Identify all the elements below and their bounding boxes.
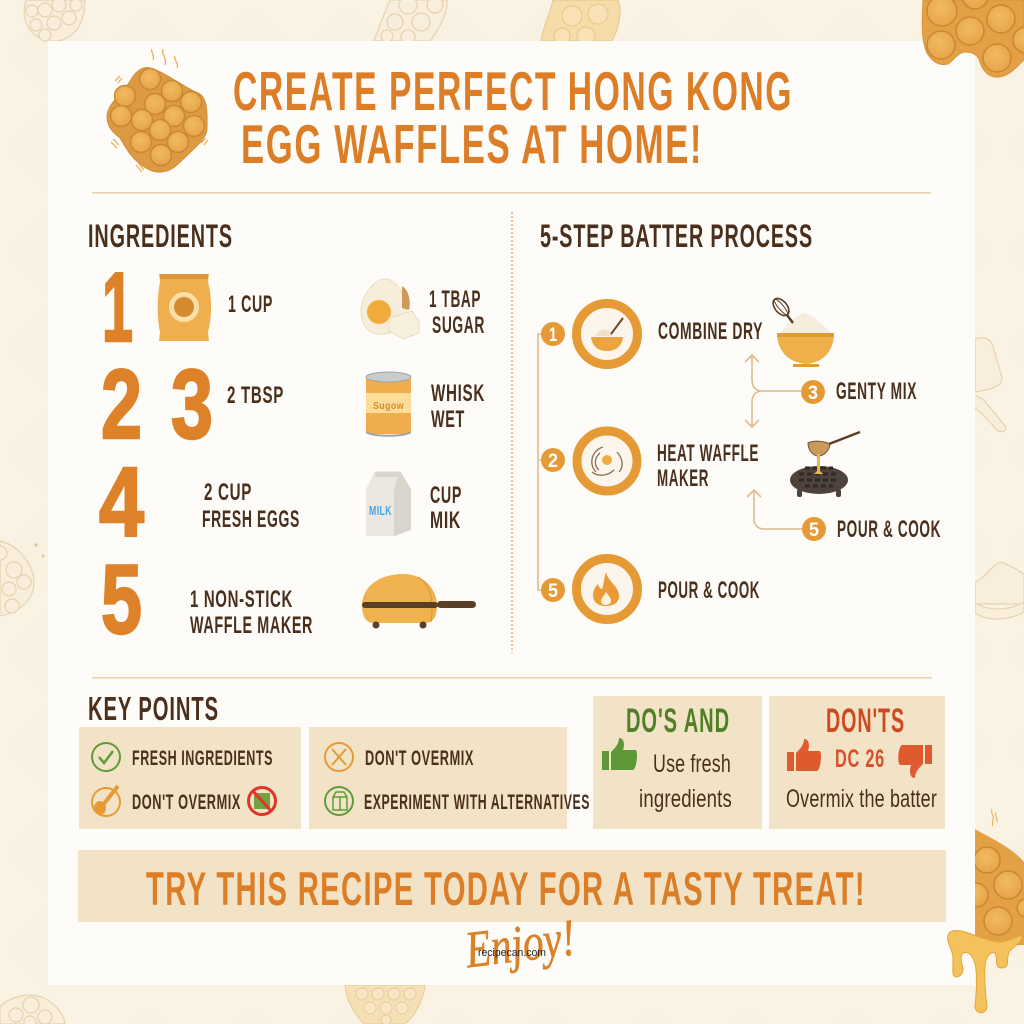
do's heading: DO'S AND — [626, 702, 730, 740]
icon: no mixing — [248, 788, 276, 814]
dotted column divider — [511, 212, 513, 653]
panel: process flow — [538, 295, 941, 620]
text: dc 26: DC 26 — [835, 745, 885, 773]
step 1: COMBINE DRY — [658, 318, 763, 345]
label: whisk wet — [431, 380, 485, 433]
arrow from step 5 — [747, 490, 802, 529]
icon: whisk and bowl — [770, 295, 834, 367]
amount: 2 cup fresh eggs: FRESH EGGS — [202, 506, 300, 533]
background sketch waffle: top left — [24, 0, 85, 41]
icon: thumbs down red — [898, 745, 932, 778]
number 5: 5 — [101, 544, 142, 654]
do text: ingredients — [639, 785, 732, 813]
corner waffle: top right — [922, 0, 1024, 77]
panel: don'ts — [769, 696, 945, 829]
icon: can — [366, 372, 411, 437]
step 5 — [541, 558, 760, 620]
background sketch waffle: top centre — [374, 0, 447, 44]
step 3: 3 — [808, 383, 818, 404]
text: fresh ingredients: FRESH INGREDIENTS — [132, 747, 273, 770]
amount: 1 cup: 1 CUP — [228, 291, 273, 318]
icon: thumbs up — [602, 738, 637, 770]
text: don't overmix: DON'T OVERMIX — [365, 747, 474, 770]
label: cup milk — [430, 482, 462, 534]
label: cup milk: CUP — [430, 482, 462, 509]
label: 1 tbap sugar: 1 TBAP — [429, 286, 481, 313]
icon: spoon — [92, 786, 120, 816]
divider top — [92, 192, 931, 194]
panel: ingredient list — [99, 252, 485, 654]
step 2: HEAT WAFFLE — [657, 440, 759, 467]
step 2 — [541, 431, 759, 492]
do text — [639, 750, 732, 813]
icon: milk carton — [366, 471, 411, 536]
enjoy script: Enjoy! — [461, 909, 578, 980]
icon: egg and sugar — [361, 279, 419, 339]
step 3 — [801, 378, 917, 405]
step 5 side: 5 — [809, 520, 819, 541]
icon: check — [92, 743, 120, 771]
title — [233, 60, 793, 175]
panel: key points right — [309, 727, 590, 829]
icon: flour bag — [158, 274, 211, 341]
label: 1 tbap sugar: SUGAR — [432, 312, 485, 339]
panel: do's — [593, 696, 762, 829]
don'ts heading: DON'TS — [826, 702, 905, 740]
step 3: GENTY MIX — [836, 378, 917, 405]
icon: can: Sugow — [373, 401, 404, 412]
step 5: 5 — [548, 581, 558, 602]
icon: hero egg waffle — [107, 49, 208, 172]
amount: 2 cup fresh eggs: 2 CUP — [204, 479, 252, 506]
background sketch: flour bowl — [975, 562, 1024, 619]
number 3: 3 — [171, 349, 213, 459]
step 5 side: POUR & COOK — [837, 516, 941, 543]
background waffle: top golden — [541, 0, 620, 45]
icon: waffle maker — [362, 574, 476, 628]
title: EGG WAFFLES AT HOME! — [241, 113, 703, 175]
step 2: MAKER — [657, 465, 709, 492]
call to action banner — [78, 850, 946, 922]
amount: non-stick waffle maker: 1 NON-STICK — [190, 586, 293, 613]
corner waffle with honey: bottom right — [948, 809, 1024, 1013]
label: whisk wet: WET — [431, 406, 465, 433]
background waffle: bottom centre — [345, 985, 425, 1024]
number 4: 4 — [99, 447, 144, 557]
amount: 2 cup fresh eggs — [202, 479, 300, 533]
heading: ingredients: INGREDIENTS — [88, 218, 233, 254]
label: cup milk: MIK — [430, 507, 461, 534]
background sketch waffle: bottom left — [0, 995, 65, 1024]
heading: 5-step batter process: 5-STEP BATTER PROCESS — [540, 218, 813, 254]
step 2: 2 — [548, 451, 558, 472]
label: 1 tbap sugar — [429, 286, 485, 339]
connector rail — [538, 334, 553, 590]
number 1: 1 — [102, 252, 133, 362]
amount: 2 tbsp: 2 TBSP — [227, 382, 284, 409]
text: don't overmix: DON'T OVERMIX — [132, 791, 241, 814]
amount: non-stick waffle maker — [190, 586, 313, 639]
heading: key points: KEY POINTS — [88, 690, 219, 727]
watermark: recipecan.com — [478, 947, 546, 959]
text: experiment with alternatives: EXPERIMENT WITH ALTERNATIVES — [364, 791, 590, 814]
don't text: Overmix the batter — [786, 785, 937, 813]
background sketch: scoop — [975, 338, 1006, 432]
panel: key points left — [79, 727, 301, 829]
branch arrows to step 3 — [745, 355, 801, 427]
icon: milk carton: MILK — [369, 503, 392, 518]
icon: batter pouring on waffle iron — [790, 432, 860, 497]
step 5: POUR & COOK — [658, 577, 760, 604]
step 1 — [541, 304, 763, 364]
number 2: 2 — [101, 349, 142, 459]
background sketch waffle: left — [0, 541, 44, 616]
label: whisk wet: WHISK — [431, 380, 485, 407]
divider bottom — [92, 677, 932, 678]
do text: Use fresh — [653, 750, 731, 778]
icon: cross — [325, 743, 353, 771]
icon: carton — [325, 787, 353, 815]
amount: non-stick waffle maker: WAFFLE MAKER — [190, 612, 313, 639]
step 1: 1 — [549, 325, 557, 346]
step 5 side — [802, 516, 941, 543]
icon: thumbs up red — [787, 739, 821, 771]
